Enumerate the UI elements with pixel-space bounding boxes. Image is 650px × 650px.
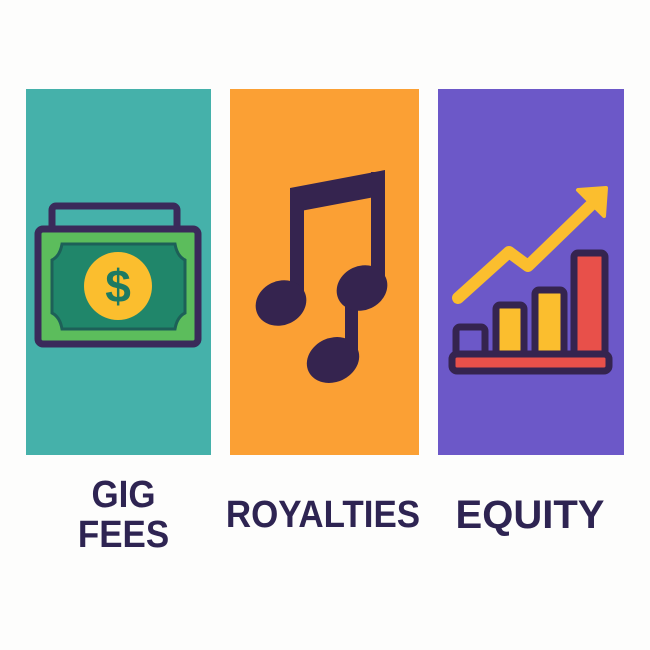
label: gig fees: FEES <box>78 514 169 556</box>
panel: gig fees <box>26 89 211 455</box>
label: equity: EQUITY <box>456 493 604 537</box>
icon: cash <box>38 206 198 344</box>
label: gig fees: GIG <box>91 474 156 516</box>
icon: growth chart <box>452 188 609 371</box>
label: royalties: ROYALTIES <box>226 494 420 536</box>
panel: royalties <box>230 89 419 455</box>
icon: cash: $ <box>105 260 131 312</box>
label: gig fees <box>78 474 169 556</box>
icon: music note <box>248 170 395 391</box>
panel: equity <box>438 89 624 455</box>
